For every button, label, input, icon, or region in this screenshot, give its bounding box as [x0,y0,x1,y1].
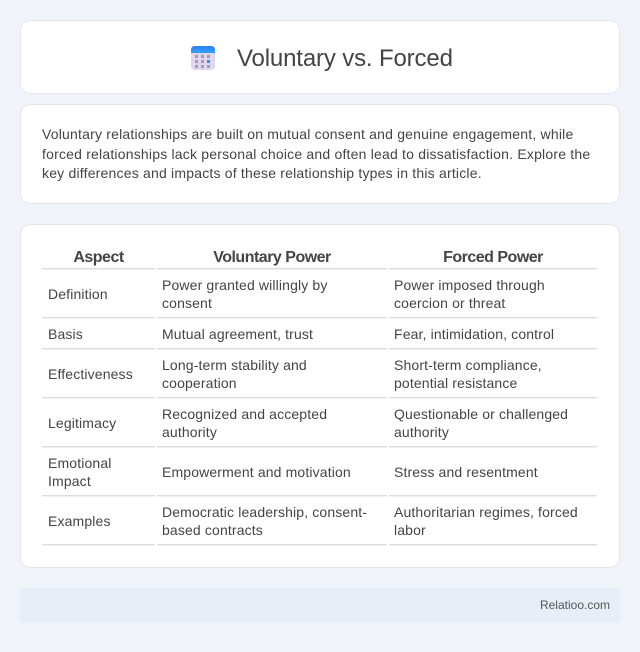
text: Questionable or challenged [394,406,568,422]
text: Power granted willingly by [162,277,328,293]
row: Definition: Definition [48,286,108,302]
text: Short-term compliance, [394,357,542,373]
row: Effectiveness: Effectiveness [48,366,133,382]
text: Democratic leadership, consent- [162,504,367,520]
row: Emotional Impact [48,455,112,489]
text: consent [162,295,212,311]
text: Power imposed through [394,277,545,293]
icon: calendar [191,46,215,70]
text: Stress and resentment [394,464,538,480]
row: Legitimacy: Legitimacy [48,415,116,431]
title: Voluntary vs. Forced [237,45,453,72]
footer [20,588,620,622]
text: potential resistance [394,375,517,391]
text: Mutual agreement, trust [162,326,313,342]
intro text: Voluntary relationships are built on mutual consent and genuine engagement, while [42,126,573,142]
text: Empowerment and motivation [162,464,351,480]
text: labor [394,522,426,538]
text: coercion or threat [394,295,505,311]
text: Long-term stability and [162,357,307,373]
text: based contracts [162,522,263,538]
row: Examples: Examples [48,513,111,529]
header: Voluntary Power: Voluntary Power [213,249,331,266]
intro text [42,126,590,181]
intro text: key differences and impacts of these relationship types in this article. [42,165,482,181]
text: cooperation [162,375,237,391]
intro text: forced relationships lack personal choice and often lead to dissatisfaction. Explore the [42,146,590,162]
text: Fear, intimidation, control [394,326,554,342]
text: Recognized and accepted [162,406,327,422]
text: authority [394,424,449,440]
row: Emotional Impact: Emotional [48,455,112,471]
footer brand: Relatioo.com [540,598,610,612]
header: Forced Power: Forced Power [443,249,543,266]
panel: introduction [20,104,620,204]
text: authority [162,424,217,440]
panel: title card [20,20,620,94]
header: Aspect: Aspect [73,249,124,266]
row: Basis: Basis [48,326,83,342]
row: Emotional Impact: Impact [48,473,91,489]
text: Authoritarian regimes, forced [394,504,578,520]
panel: comparison table [20,224,620,568]
